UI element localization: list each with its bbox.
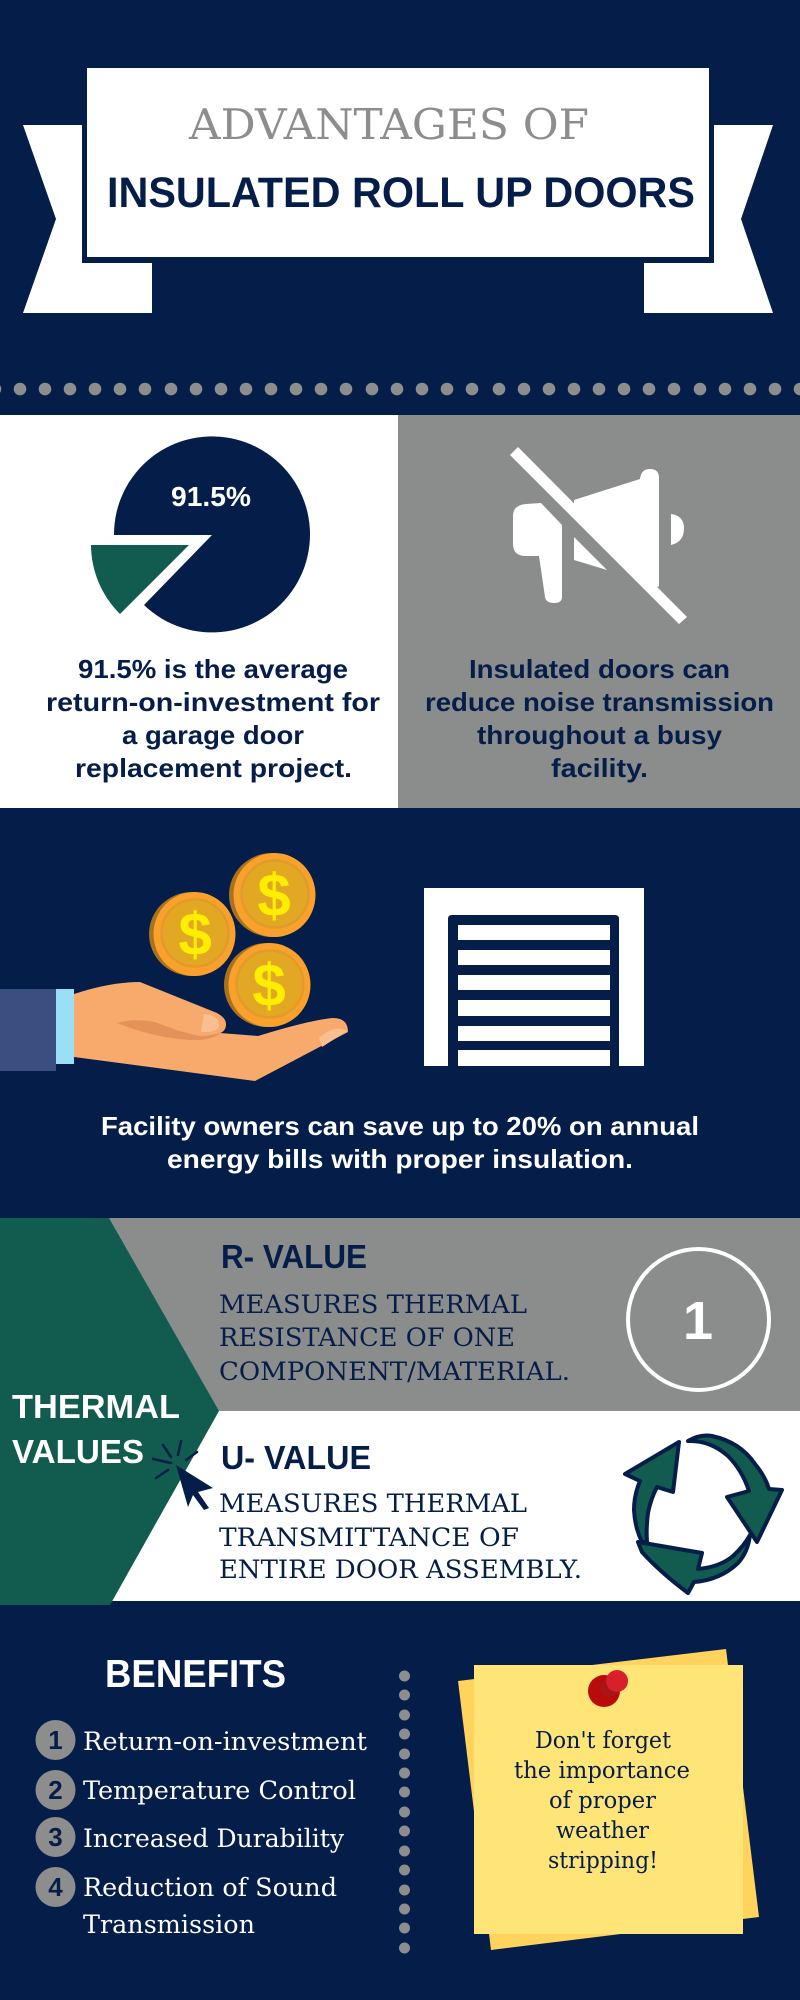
- title line 1: ADVANTAGES OF: [188, 101, 589, 150]
- roi text: replacement project.: [75, 753, 352, 783]
- roi text: [46, 654, 380, 783]
- u-value text: [219, 1489, 582, 1585]
- coin left: $: [178, 901, 212, 968]
- roi text: 91.5% is the average: [78, 654, 348, 684]
- savings text: Facility owners can save up to 20% on annual: [101, 1111, 699, 1141]
- pie chart: [91, 436, 310, 632]
- benefit 4: 4: [48, 1872, 63, 1902]
- icon: number one circle: 1: [683, 1291, 713, 1351]
- ribbon tail right: [644, 125, 773, 313]
- benefit 1: 1: [48, 1725, 63, 1755]
- pie main slice: [114, 436, 310, 632]
- savings text: energy bills with proper insulation.: [167, 1144, 633, 1174]
- pie value: 91.5%: [171, 481, 251, 512]
- benefit 3: Increased Durability: [83, 1824, 345, 1854]
- coin top: $: [257, 862, 291, 929]
- r-value text: [219, 1290, 570, 1387]
- note text: [514, 1726, 690, 1874]
- panel: noise reduction: [398, 415, 800, 808]
- icon: muted megaphone: [510, 447, 687, 624]
- benefit 2: Temperature Control: [83, 1776, 356, 1806]
- pie small slice: [91, 545, 189, 614]
- thermal values heading: [12, 1388, 180, 1470]
- noise text: reduce noise transmission: [425, 687, 774, 717]
- benefit 1: [36, 1720, 368, 1760]
- noise text: [425, 654, 774, 783]
- icon: red push pin: [588, 1670, 628, 1707]
- benefits heading: BENEFITS: [105, 1653, 286, 1696]
- noise text: throughout a busy: [477, 720, 723, 750]
- coin bottom: $: [252, 952, 286, 1019]
- panel: energy savings: [0, 853, 699, 1174]
- green arrow shape: [0, 1218, 219, 1605]
- savings text: [101, 1111, 699, 1174]
- benefit 4: Reduction of Sound: [83, 1873, 337, 1903]
- thermal values heading: THERMAL: [12, 1388, 180, 1425]
- back note: [458, 1649, 759, 1950]
- thermal values heading: VALUES: [12, 1433, 144, 1470]
- noise text: Insulated doors can: [469, 654, 730, 684]
- hand: [0, 982, 348, 1081]
- roi text: a garage door: [122, 720, 304, 750]
- note text: weather: [556, 1816, 650, 1844]
- dotted divider: [0, 383, 800, 395]
- u-value heading: U- VALUE: [221, 1439, 371, 1476]
- front note: [474, 1665, 743, 1934]
- u-value text: TRANSMITTANCE OF: [219, 1523, 519, 1553]
- benefit 2: [36, 1770, 356, 1810]
- benefit 4: Transmission: [83, 1910, 255, 1940]
- icon: recycle arrows: [625, 1436, 782, 1593]
- r-value heading: R- VALUE: [221, 1238, 367, 1275]
- panel: return on investment: [0, 415, 398, 808]
- benefit 3: 3: [48, 1822, 63, 1852]
- panel: thermal values: [0, 1218, 800, 1605]
- benefit 1: Return-on-investment: [83, 1727, 368, 1757]
- vertical dotted divider: [399, 1670, 410, 1954]
- sticky note callout: [458, 1649, 759, 1950]
- note text: of proper: [549, 1786, 657, 1814]
- r-value text: RESISTANCE OF ONE: [219, 1323, 515, 1353]
- title line 2: INSULATED ROLL UP DOORS: [107, 169, 695, 217]
- icon: roll up door: [424, 888, 644, 1066]
- note text: Don't forget: [535, 1726, 672, 1754]
- u-value text: ENTIRE DOOR ASSEMBLY.: [219, 1555, 582, 1585]
- icon: hand with coins: [0, 853, 348, 1081]
- note text: the importance: [514, 1756, 690, 1784]
- coin bottom: [224, 943, 310, 1027]
- u-value text: MEASURES THERMAL: [219, 1489, 527, 1519]
- panel: benefits: [36, 1653, 368, 1940]
- r-value text: MEASURES THERMAL: [219, 1290, 527, 1320]
- title panel: [87, 68, 709, 257]
- r-value text: COMPONENT/MATERIAL.: [219, 1357, 570, 1387]
- title banner: [23, 68, 773, 313]
- coin left: [149, 892, 236, 976]
- ribbon tail left: [23, 125, 152, 313]
- note text: stripping!: [548, 1846, 658, 1874]
- noise text: facility.: [551, 753, 648, 783]
- coin top: [229, 853, 316, 937]
- benefit 4: [36, 1867, 337, 1940]
- icon: number one circle: [628, 1249, 769, 1390]
- u-value band: [0, 1411, 800, 1601]
- benefit 3: [36, 1817, 345, 1857]
- r-value band: [0, 1218, 800, 1411]
- roi text: return-on-investment for: [46, 687, 380, 717]
- benefit 2: 2: [48, 1775, 63, 1805]
- icon: cursor click: [153, 1441, 213, 1510]
